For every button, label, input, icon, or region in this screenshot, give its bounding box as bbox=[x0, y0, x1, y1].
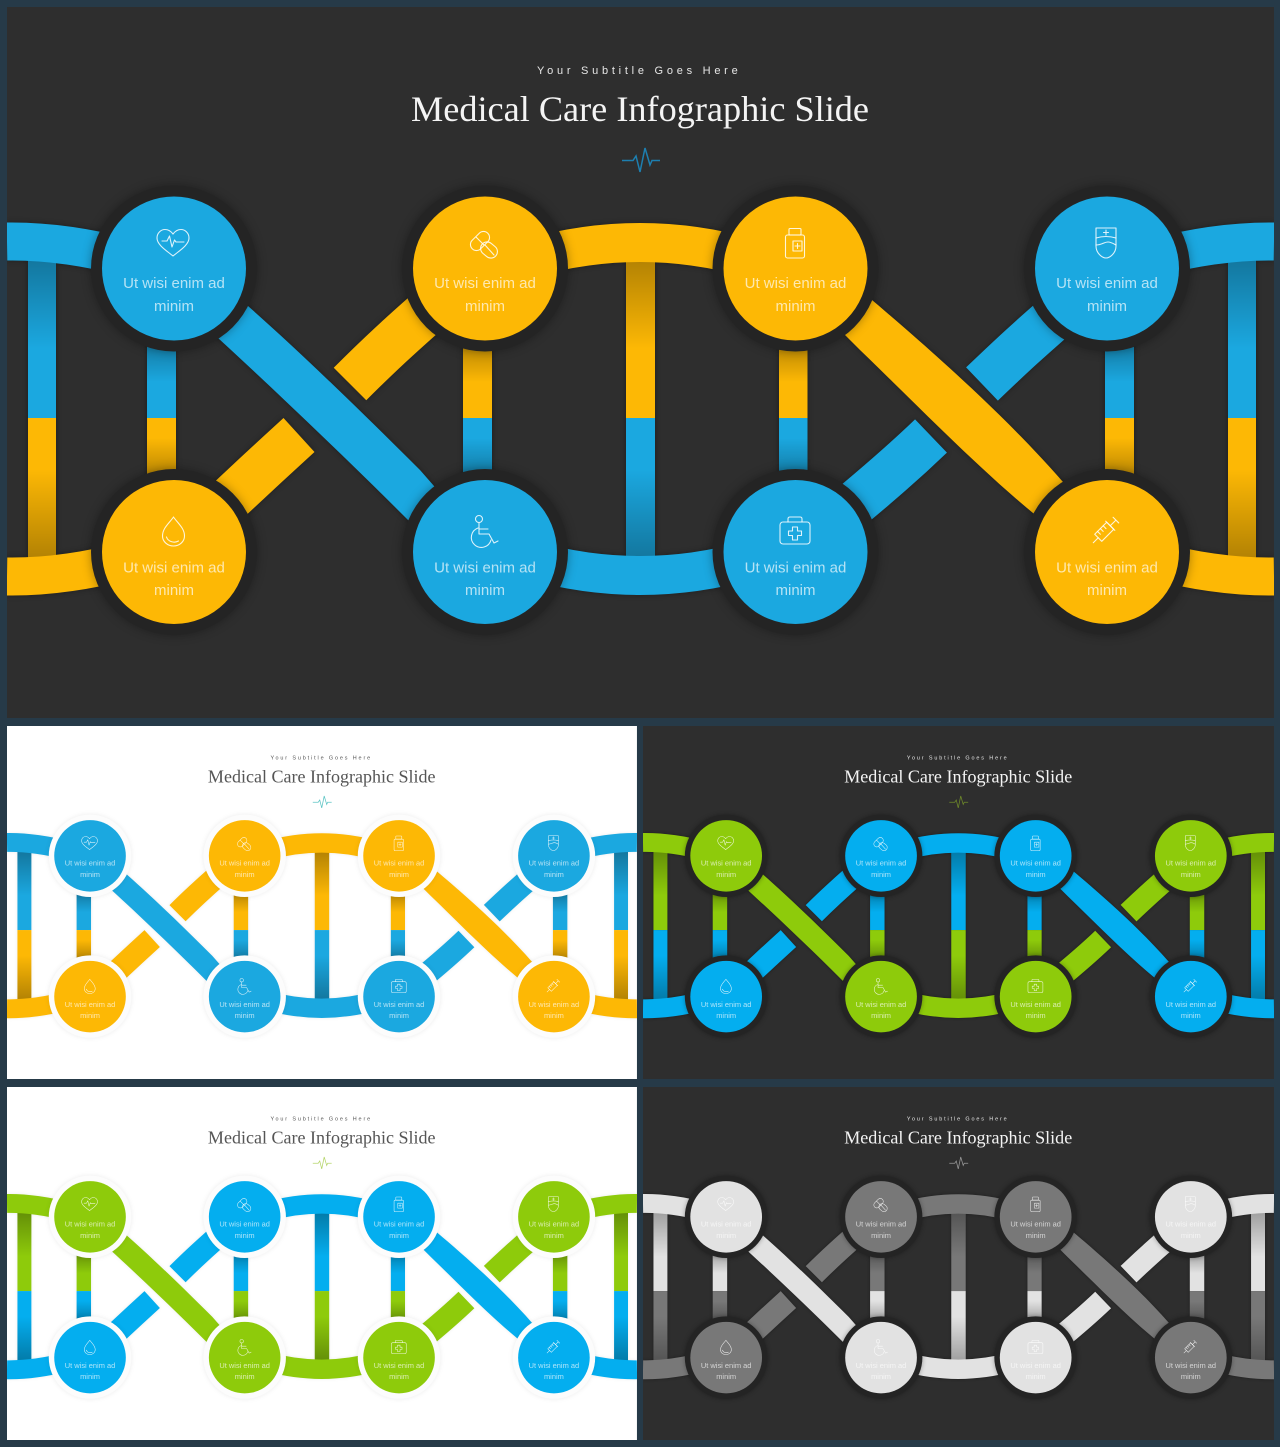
node: heart bbox=[49, 1176, 131, 1258]
icon: pulse line bbox=[949, 1157, 968, 1169]
title: Medical Care Infographic Slide bbox=[411, 89, 869, 129]
node: medical kit bbox=[994, 955, 1077, 1038]
node: bottle: Ut wisi enim ad bbox=[745, 275, 846, 292]
node: bottle bbox=[358, 815, 440, 897]
node: syringe: minim bbox=[544, 1011, 564, 1020]
node: nurse: minim bbox=[544, 870, 564, 879]
node: wheelchair: minim bbox=[871, 1372, 891, 1381]
node: drop: Ut wisi enim ad bbox=[123, 560, 225, 576]
node: syringe: Ut wisi enim ad bbox=[1056, 560, 1158, 576]
node: nurse: Ut wisi enim ad bbox=[1166, 859, 1216, 868]
node: syringe: minim bbox=[1181, 1011, 1201, 1020]
node: wheelchair: minim bbox=[235, 1372, 255, 1381]
node: bottle: Ut wisi enim ad bbox=[1010, 859, 1061, 868]
node: medical kit: minim bbox=[1026, 1011, 1046, 1020]
node: wheelchair: Ut wisi enim ad bbox=[856, 1000, 906, 1009]
node: pills bbox=[203, 1176, 286, 1258]
node: wheelchair bbox=[203, 955, 286, 1038]
node: syringe bbox=[1024, 469, 1190, 635]
node: syringe bbox=[513, 955, 595, 1038]
title: Medical Care Infographic Slide bbox=[844, 1128, 1072, 1148]
node: nurse: Ut wisi enim ad bbox=[529, 859, 579, 868]
node: wheelchair bbox=[840, 955, 922, 1038]
node: pills: minim bbox=[465, 298, 505, 315]
DNA strands and rungs bbox=[7, 241, 1274, 577]
node: wheelchair: Ut wisi enim ad bbox=[219, 1361, 270, 1370]
node: heart bbox=[685, 815, 768, 897]
title: Medical Care Infographic Slide bbox=[208, 767, 436, 787]
node: syringe: Ut wisi enim ad bbox=[1166, 1361, 1216, 1370]
node: nurse bbox=[513, 1176, 595, 1258]
node: pills bbox=[840, 815, 922, 897]
node: wheelchair: Ut wisi enim ad bbox=[856, 1361, 906, 1370]
subtitle: Your Subtitle Goes Here bbox=[907, 1116, 1009, 1122]
node: wheelchair: minim bbox=[235, 1011, 255, 1020]
panel: main dark blue and yellow slide bbox=[7, 7, 1274, 718]
subtitle: Your Subtitle Goes Here bbox=[907, 755, 1009, 761]
icon: pulse line bbox=[949, 796, 968, 808]
node: pills: minim bbox=[871, 1231, 891, 1240]
node: heart: minim bbox=[80, 1231, 100, 1240]
node: syringe: minim bbox=[1087, 582, 1127, 599]
node: bottle: minim bbox=[389, 1231, 409, 1240]
node: pills: Ut wisi enim ad bbox=[219, 859, 270, 868]
node: nurse: Ut wisi enim ad bbox=[1056, 275, 1158, 292]
DNA strands and rungs bbox=[7, 842, 637, 1009]
node: wheelchair bbox=[840, 1316, 922, 1399]
node: syringe: minim bbox=[1181, 1372, 1201, 1381]
node: syringe bbox=[1149, 955, 1232, 1038]
node: pills: Ut wisi enim ad bbox=[434, 275, 536, 292]
node: drop: Ut wisi enim ad bbox=[65, 1361, 115, 1370]
node: heart: minim bbox=[154, 298, 194, 315]
node: bottle: minim bbox=[1026, 1231, 1046, 1240]
node: medical kit bbox=[358, 1316, 440, 1399]
node: drop bbox=[91, 469, 257, 635]
node: drop: minim bbox=[154, 582, 194, 599]
node: bottle bbox=[358, 1176, 440, 1258]
node: wheelchair bbox=[402, 469, 568, 635]
node: heart: minim bbox=[80, 870, 100, 879]
node: bottle: minim bbox=[776, 298, 816, 315]
node: medical kit: minim bbox=[1026, 1372, 1046, 1381]
node: pills bbox=[203, 815, 286, 897]
title: Medical Care Infographic Slide bbox=[844, 767, 1072, 787]
node: pills: Ut wisi enim ad bbox=[856, 1220, 906, 1229]
node: syringe: Ut wisi enim ad bbox=[529, 1000, 579, 1009]
node: medical kit: minim bbox=[776, 582, 816, 599]
node: bottle: Ut wisi enim ad bbox=[374, 859, 424, 868]
node: medical kit: minim bbox=[389, 1372, 409, 1381]
icon: pulse line bbox=[622, 148, 660, 172]
node: nurse: Ut wisi enim ad bbox=[529, 1220, 579, 1229]
node: heart bbox=[685, 1176, 768, 1258]
node: medical kit: minim bbox=[389, 1011, 409, 1020]
node: nurse bbox=[513, 815, 595, 897]
node: heart: minim bbox=[716, 870, 736, 879]
node: drop bbox=[49, 1316, 131, 1399]
node: drop bbox=[685, 1316, 768, 1399]
node: drop bbox=[49, 955, 131, 1038]
node: heart: Ut wisi enim ad bbox=[123, 275, 225, 292]
node: drop: minim bbox=[716, 1011, 736, 1020]
node: medical kit bbox=[994, 1316, 1077, 1399]
node: syringe: Ut wisi enim ad bbox=[529, 1361, 579, 1370]
panel: dark green and blue variant bbox=[643, 726, 1274, 1079]
node: medical kit bbox=[358, 955, 440, 1038]
node: wheelchair: Ut wisi enim ad bbox=[219, 1000, 270, 1009]
node: syringe bbox=[513, 1316, 595, 1399]
node: pills bbox=[402, 186, 568, 352]
DNA strands and rungs bbox=[643, 842, 1274, 1009]
node: medical kit: Ut wisi enim ad bbox=[374, 1361, 424, 1370]
node: wheelchair: minim bbox=[871, 1011, 891, 1020]
node: heart bbox=[91, 186, 257, 352]
node: syringe bbox=[1149, 1316, 1232, 1399]
node: nurse bbox=[1024, 186, 1190, 352]
node: medical kit bbox=[712, 469, 878, 635]
node: drop: Ut wisi enim ad bbox=[65, 1000, 115, 1009]
node: heart bbox=[49, 815, 131, 897]
icon: pulse line bbox=[313, 1157, 332, 1169]
node: bottle: Ut wisi enim ad bbox=[1010, 1220, 1061, 1229]
node: drop bbox=[685, 955, 768, 1038]
node: wheelchair: Ut wisi enim ad bbox=[434, 560, 536, 576]
node: drop: minim bbox=[80, 1011, 100, 1020]
node: medical kit: Ut wisi enim ad bbox=[1010, 1361, 1061, 1370]
node: bottle bbox=[994, 815, 1077, 897]
node: pills: Ut wisi enim ad bbox=[219, 1220, 270, 1229]
node: medical kit: Ut wisi enim ad bbox=[1010, 1000, 1061, 1009]
node: heart: minim bbox=[716, 1231, 736, 1240]
node: pills bbox=[840, 1176, 922, 1258]
panel: white blue and yellow variant bbox=[7, 726, 637, 1079]
node: nurse: minim bbox=[1181, 1231, 1201, 1240]
panel: dark grayscale variant bbox=[643, 1087, 1274, 1440]
node: nurse bbox=[1149, 815, 1232, 897]
icon: pulse line bbox=[313, 796, 332, 808]
node: bottle: minim bbox=[1026, 870, 1046, 879]
node: heart: Ut wisi enim ad bbox=[65, 1220, 115, 1229]
node: nurse: minim bbox=[544, 1231, 564, 1240]
node: bottle bbox=[712, 186, 878, 352]
node: drop: minim bbox=[716, 1372, 736, 1381]
node: nurse bbox=[1149, 1176, 1232, 1258]
node: heart: Ut wisi enim ad bbox=[65, 859, 115, 868]
node: wheelchair: minim bbox=[465, 582, 505, 599]
node: drop: Ut wisi enim ad bbox=[701, 1000, 751, 1009]
node: drop: minim bbox=[80, 1372, 100, 1381]
node: bottle bbox=[994, 1176, 1077, 1258]
node: heart: Ut wisi enim ad bbox=[701, 1220, 751, 1229]
title: Medical Care Infographic Slide bbox=[208, 1128, 436, 1148]
node: nurse: minim bbox=[1087, 298, 1127, 315]
node: nurse: minim bbox=[1181, 870, 1201, 879]
subtitle: Your Subtitle Goes Here bbox=[271, 1116, 372, 1122]
node: pills: minim bbox=[235, 870, 255, 879]
node: medical kit: Ut wisi enim ad bbox=[745, 560, 846, 576]
node: heart: Ut wisi enim ad bbox=[701, 859, 751, 868]
node: medical kit: Ut wisi enim ad bbox=[374, 1000, 424, 1009]
node: pills: minim bbox=[235, 1231, 255, 1240]
subtitle: Your Subtitle Goes Here bbox=[537, 65, 741, 77]
panel: white green and blue variant bbox=[7, 1087, 637, 1440]
node: bottle: Ut wisi enim ad bbox=[374, 1220, 424, 1229]
node: bottle: minim bbox=[389, 870, 409, 879]
node: drop: Ut wisi enim ad bbox=[701, 1361, 751, 1370]
node: nurse: Ut wisi enim ad bbox=[1166, 1220, 1216, 1229]
node: wheelchair bbox=[203, 1316, 286, 1399]
node: pills: Ut wisi enim ad bbox=[856, 859, 906, 868]
node: syringe: Ut wisi enim ad bbox=[1166, 1000, 1216, 1009]
DNA strands and rungs bbox=[643, 1203, 1274, 1370]
subtitle: Your Subtitle Goes Here bbox=[271, 755, 372, 761]
node: pills: minim bbox=[871, 870, 891, 879]
DNA strands and rungs bbox=[7, 1203, 637, 1370]
node: syringe: minim bbox=[544, 1372, 564, 1381]
